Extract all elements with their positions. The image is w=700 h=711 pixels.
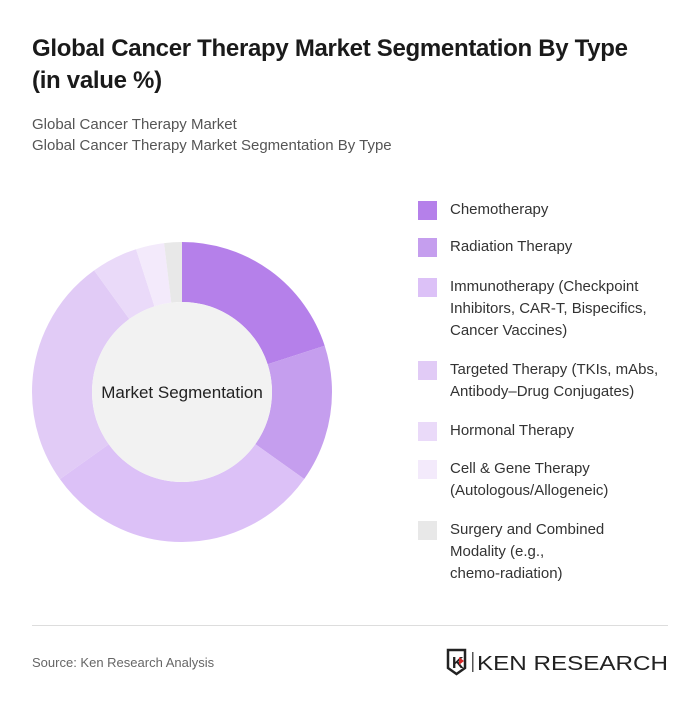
title: (in value %) <box>32 67 162 94</box>
donut chart <box>32 242 332 542</box>
subtitle: Global Cancer Therapy Market <box>32 116 237 133</box>
legend: cell gene: Cell & Gene Therapy <box>450 460 590 477</box>
source: Source: Ken Research Analysis <box>32 655 214 670</box>
donut chart: Market Segmentation <box>101 383 263 402</box>
legend: surgery: Modality (e.g., <box>450 543 544 560</box>
legend: hormonal: Hormonal Therapy <box>450 422 574 439</box>
legend: immunotherapy: Inhibitors, CAR-T, Bispecifics, <box>450 300 647 317</box>
legend: immunotherapy: Cancer Vaccines) <box>450 322 567 339</box>
legend: surgery <box>418 521 604 582</box>
legend: chemotherapy: Chemotherapy <box>450 201 548 218</box>
title <box>32 35 628 94</box>
legend: chemotherapy <box>418 201 548 220</box>
subtitle: Global Cancer Therapy Market Segmentation By Type <box>32 137 392 154</box>
subtitle <box>32 116 392 154</box>
legend: immunotherapy <box>418 278 647 339</box>
logo <box>446 648 668 676</box>
legend: targeted: Antibody–Drug Conjugates) <box>450 383 634 400</box>
legend: targeted <box>418 361 658 400</box>
legend: targeted: Targeted Therapy (TKIs, mAbs, <box>450 361 658 378</box>
legend: cell gene <box>418 460 608 499</box>
logo: K <box>452 655 464 672</box>
logo: KEN RESEARCH <box>477 653 668 675</box>
legend: surgery: chemo-radiation) <box>450 565 563 582</box>
legend: immunotherapy: Immunotherapy (Checkpoint <box>450 278 638 295</box>
legend: cell gene: (Autologous/Allogeneic) <box>450 482 608 499</box>
title: Global Cancer Therapy Market Segmentation By Type <box>32 35 628 62</box>
legend: surgery: Surgery and Combined <box>450 521 604 538</box>
legend: radiation: Radiation Therapy <box>450 238 572 255</box>
